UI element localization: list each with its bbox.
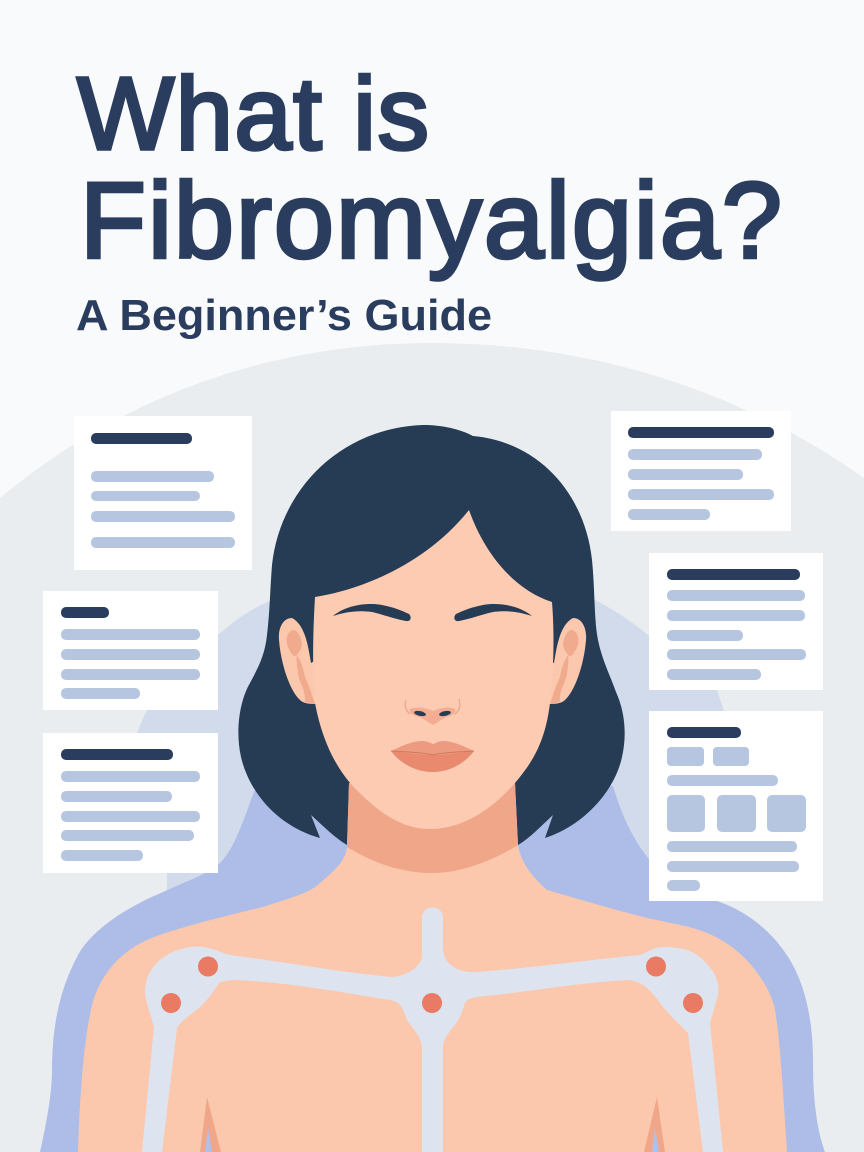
nose [405, 699, 460, 725]
right inner ear [550, 630, 578, 704]
right ear [547, 618, 586, 704]
right chest shading [644, 1097, 665, 1152]
pain points [161, 956, 703, 1013]
card: bottom left [43, 733, 218, 873]
title: What is [77, 56, 429, 171]
background arch [0, 343, 864, 1152]
right eyebrow [454, 604, 532, 621]
left ear [279, 618, 318, 704]
title: Fibromyalgia? [80, 160, 782, 280]
pale aura behind figure [130, 595, 732, 893]
subtitle: A Beginner’s Guide [76, 291, 492, 340]
card: middle right [649, 553, 823, 690]
body [78, 783, 787, 1152]
left eyebrow [333, 604, 411, 621]
card: top right [611, 411, 791, 531]
title [77, 56, 782, 280]
left chest shading [200, 1097, 221, 1152]
card: top left [74, 416, 252, 570]
figure [78, 425, 787, 1152]
mouth [391, 741, 474, 772]
face [313, 510, 553, 829]
blue aura behind figure [40, 784, 825, 1152]
neck shadow [347, 783, 518, 873]
card: bottom right [649, 711, 823, 901]
skeleton lines [142, 908, 723, 1152]
hair [238, 425, 625, 845]
card: middle left [43, 591, 218, 710]
left inner ear [287, 630, 315, 704]
